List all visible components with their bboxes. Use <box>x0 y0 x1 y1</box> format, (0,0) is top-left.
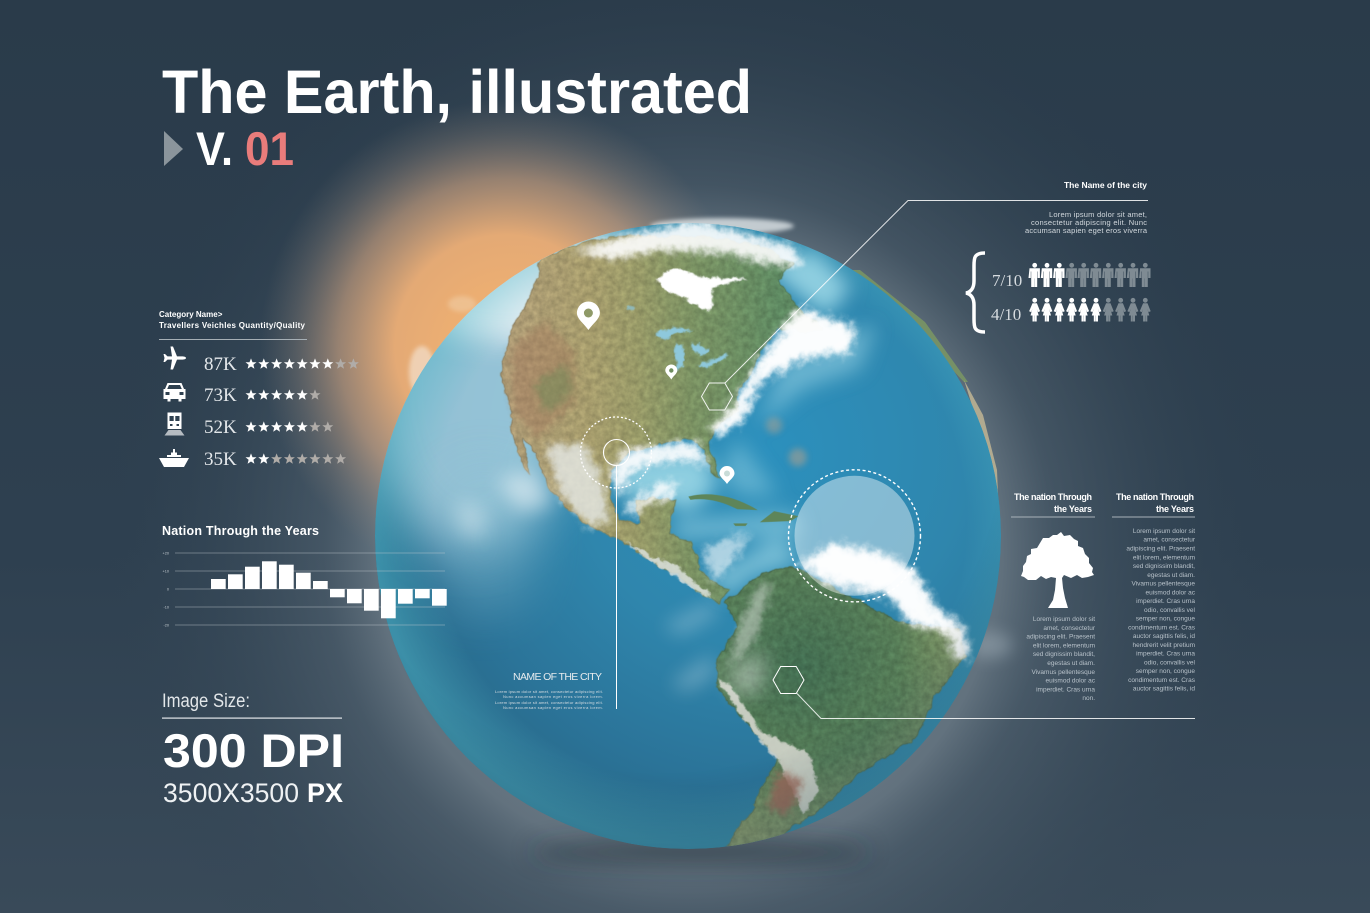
panel: image size: PX <box>307 778 343 808</box>
text column: sed dignissim blandit, <box>1033 651 1095 658</box>
icon: plane <box>164 346 186 370</box>
panel: people ratio pictograms <box>966 253 1151 332</box>
panel: nation note text column: odio, convallis vel <box>1144 659 1196 666</box>
map pin: large <box>577 302 600 330</box>
icon: train <box>164 412 184 436</box>
panel: nation through the years bar chart <box>162 524 447 628</box>
annotation: hexagon with leader to nation note <box>773 666 1195 718</box>
panel: name of the city note: accumsan sapien eget eros viverra <box>1025 226 1148 235</box>
panel: nation note text column: Lorem ipsum dolor sit <box>1133 528 1195 535</box>
men row <box>1028 263 1151 287</box>
map pin: medium <box>665 364 677 380</box>
globe <box>365 200 1001 849</box>
row: train rating <box>204 417 333 438</box>
title: The Earth, illustrated <box>162 58 752 126</box>
row: car rating <box>204 385 320 406</box>
text column: non. <box>1082 695 1095 702</box>
text column <box>1026 616 1096 702</box>
text column: Vivamus pellentesque <box>1032 669 1095 676</box>
row: plane rating <box>204 354 359 375</box>
row: train rating: 52K <box>204 417 237 438</box>
annotation: dashed target circle with leader line <box>580 417 652 709</box>
icon: ship <box>159 449 189 467</box>
heading: Category Name> <box>159 310 223 319</box>
clouds beyond the globe edge <box>409 218 1012 658</box>
chart axis <box>175 553 445 625</box>
panel: image size: 3500X3500 <box>163 778 299 808</box>
heading: Travellers Veichles Quantity/Quality <box>159 321 306 330</box>
panel: nation note text column: sed dignissim blandit, <box>1133 563 1195 570</box>
heading <box>1014 492 1092 514</box>
chart axis labels: -20 <box>164 624 169 628</box>
panel: nation note text column: semper non, congue <box>1136 668 1195 675</box>
panel: name of the city note: Lorem ipsum dolor sit amet, <box>1049 210 1147 219</box>
shallow water shelves <box>619 251 876 598</box>
chart axis labels: +10 <box>163 570 169 574</box>
panel: nation note text column: imperdiet. Cras urna <box>1136 598 1195 605</box>
row: ship rating <box>204 449 346 470</box>
panel: name of the city note: The Name of the city <box>1064 180 1147 190</box>
annotation: name of the city: NAME OF THE CITY <box>513 671 602 683</box>
panel: nation note text column: hendrerit velit pretium <box>1132 642 1195 649</box>
panel: nation note with tree <box>1011 492 1096 702</box>
text column: elit lorem, elementum <box>1033 642 1095 650</box>
panel: image size <box>162 691 344 808</box>
text column: adipiscing elit. Praesent <box>1026 634 1095 640</box>
ocean <box>365 200 1001 849</box>
annotation: name of the city: Lorem ipsum dolor sit amet, consectetur adipiscing elit. <box>495 700 603 705</box>
panel: nation note text column: Vivamus pellentesque <box>1132 580 1195 588</box>
chart axis labels: -10 <box>164 606 169 610</box>
heading: The nation Through <box>1014 492 1092 502</box>
panel: nation note text column: auctor sagittis felis, id <box>1133 686 1195 692</box>
annotation: name of the city: Nunc accumsan sapien eget eros viverra lorem. <box>503 705 603 710</box>
text column: imperdiet. Cras urna <box>1036 686 1095 694</box>
ratio labels <box>991 271 1022 324</box>
icon: tree <box>1021 532 1094 608</box>
panel: name of the city note <box>1025 180 1148 235</box>
panel: traveller vehicles <box>159 310 359 470</box>
heading: the Years <box>1054 504 1092 514</box>
panel: nation note text column: adipiscing elit. Praesent <box>1126 546 1195 552</box>
women row <box>1029 298 1151 322</box>
subtitle: version: V. <box>196 122 233 175</box>
panel: nation note text column: condimentum est. Cras <box>1128 677 1196 684</box>
row: plane rating: 87K <box>204 354 237 375</box>
Rocky Mountains and Andes relief <box>511 320 819 814</box>
chart bars <box>211 561 447 618</box>
panel: nation note text column: egestas ut diam. <box>1147 572 1195 579</box>
panel: nation note text column: imperdiet. Cras urna <box>1136 650 1195 658</box>
subtitle: version: 01 <box>245 122 294 175</box>
ratio labels: 7/10 <box>992 271 1022 290</box>
annotation: name of the city <box>495 671 603 710</box>
Great Lakes <box>628 304 729 371</box>
row: car rating: 73K <box>204 385 237 406</box>
arctic ice and Hudson Bay <box>574 220 803 312</box>
row: ship rating: 35K <box>204 449 237 470</box>
icon: car <box>164 383 186 402</box>
panel: nation note text column: condimentum est. Cras <box>1128 624 1196 631</box>
map layer <box>456 220 970 847</box>
panel: image size: 300 DPI <box>163 724 344 777</box>
chart axis labels <box>163 552 169 628</box>
panel: nation note text column: euismod dolor ac <box>1146 589 1196 596</box>
clouds <box>456 308 970 696</box>
annotation: name of the city: Lorem ipsum dolor sit amet, consectetur adipiscing elit. <box>495 689 603 694</box>
annotation: hexagon with leader to city note <box>702 200 1148 410</box>
annotation: translucent highlight circle <box>788 470 920 602</box>
panel: nation note text column: The nation Through <box>1116 492 1194 502</box>
annotation: name of the city: Nunc accumsan sapien eget eros viverra lorem. <box>503 694 603 699</box>
text column: egestas ut diam. <box>1047 660 1095 667</box>
panel: nation note text column <box>1112 492 1196 692</box>
land: Caribbean islands <box>688 494 799 526</box>
panel: nation note text column: elit lorem, elementum <box>1133 554 1195 561</box>
panel: nation note text column: semper non, congue <box>1136 616 1195 622</box>
chart axis labels: +20 <box>163 552 169 556</box>
panel: nation note text column: odio, convallis vel <box>1144 607 1196 614</box>
panel: nation note text column: the Years <box>1156 504 1194 514</box>
map pin: small <box>720 466 734 484</box>
ratio labels: 4/10 <box>991 305 1021 324</box>
panel: nation note text column: amet, consectetur <box>1143 537 1196 544</box>
panel: image size: Image Size: <box>162 691 250 712</box>
land: South America <box>717 565 966 847</box>
heading <box>159 310 307 340</box>
subtitle: version <box>164 122 294 175</box>
text column: Lorem ipsum dolor sit <box>1033 616 1095 623</box>
brace <box>966 253 985 332</box>
chart axis labels: 0 <box>167 588 169 592</box>
text column: amet, consectetur <box>1043 625 1096 632</box>
chart heading: Nation Through the Years <box>162 524 319 538</box>
orange reflections <box>766 417 782 434</box>
panel: nation note text column: auctor sagittis felis, id <box>1133 633 1195 640</box>
panel: name of the city note: consectetur adipiscing elit. Nunc <box>1031 218 1147 227</box>
text column: euismod dolor ac <box>1046 678 1096 684</box>
globe shadow <box>530 840 870 864</box>
land: North America <box>501 234 823 604</box>
